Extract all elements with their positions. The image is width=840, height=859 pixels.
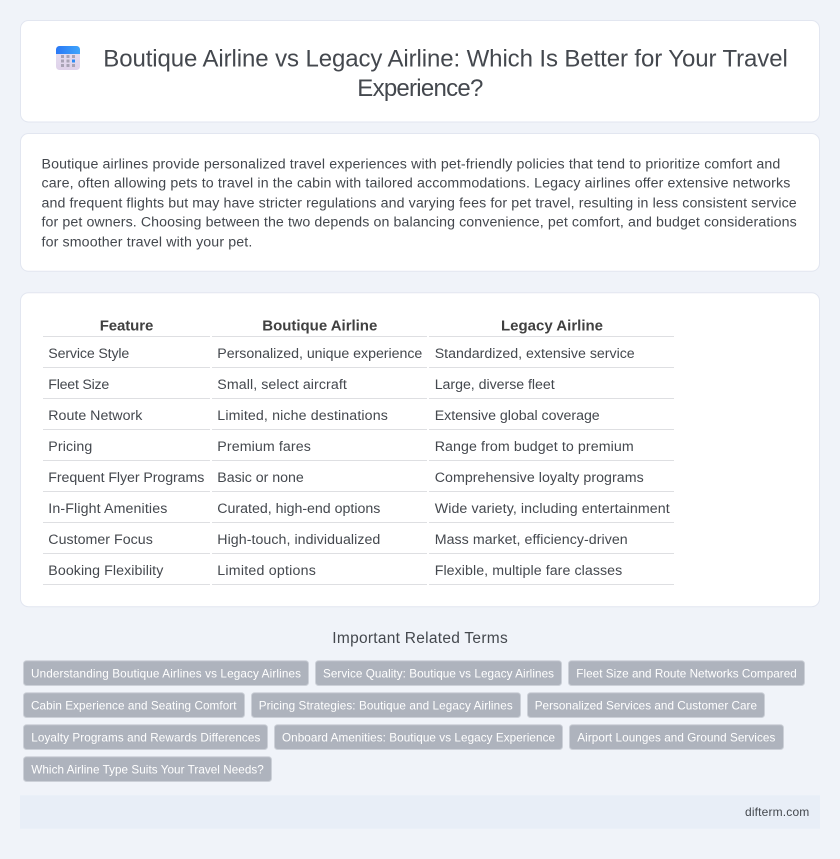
- table row: fleet size: Large, diverse fleet: [435, 377, 555, 393]
- table row: booking flexibility: [43, 563, 674, 585]
- table row: service style: Service Style: [48, 346, 129, 362]
- table row: customer focus: Customer Focus: [48, 532, 153, 548]
- table header row: Legacy Airline: [501, 318, 603, 334]
- table row: route network: Extensive global coverage: [435, 408, 600, 424]
- tag: onboard amenities: [274, 725, 562, 750]
- table row: service style: [43, 346, 674, 368]
- tag: pricing strategies: Pricing Strategies: Boutique and Legacy Airlines: [259, 699, 513, 712]
- table header row: Boutique Airline: [262, 318, 377, 334]
- tag: loyalty programs: [24, 725, 268, 750]
- tag: airport lounges: Airport Lounges and Ground Services: [577, 731, 775, 744]
- icon: calendar: [56, 46, 80, 70]
- panel: header: [20, 20, 820, 122]
- table row: route network: Limited, niche destinations: [217, 408, 388, 424]
- table row: pricing: Range from budget to premium: [435, 439, 634, 455]
- table row: route network: [43, 408, 674, 430]
- table row: fleet size: [43, 377, 674, 399]
- footer: difterm.com: [745, 805, 809, 819]
- tag: which airline type: Which Airline Type Suits Your Travel Needs?: [31, 763, 264, 776]
- table row: fleet size: Small, select aircraft: [217, 377, 347, 393]
- panel: introduction: [20, 134, 820, 271]
- text block: introduction paragraph: for smoother travel with your pet.: [42, 234, 252, 250]
- table header row: Feature: [100, 318, 153, 334]
- table row: in-flight amenities: Curated, high-end options: [217, 501, 380, 517]
- title: Experience?: [357, 75, 483, 102]
- table row: frequent flyer programs: Comprehensive loyalty programs: [435, 470, 644, 486]
- tag: understanding: Understanding Boutique Airlines vs Legacy Airlines: [31, 667, 301, 680]
- table row: pricing: [43, 439, 674, 461]
- tag: airport lounges: [570, 725, 784, 750]
- table row: service style: Personalized, unique experience: [217, 346, 422, 362]
- table row: pricing: Premium fares: [217, 439, 311, 455]
- title: [103, 46, 788, 102]
- tag: onboard amenities: Onboard Amenities: Boutique vs Legacy Experience: [282, 731, 555, 744]
- tag: pricing strategies: [252, 693, 520, 718]
- text block: introduction paragraph: [42, 156, 797, 250]
- heading: important related terms: Important Related Terms: [332, 630, 508, 647]
- text block: introduction paragraph: care, often allowing pets to travel in the cabin with tailored accommodations. Legacy airlines offer extensive networks: [42, 176, 790, 192]
- title: Boutique Airline vs Legacy Airline: Which Is Better for Your Travel: [103, 46, 788, 73]
- table row: in-flight amenities: In-Flight Amenities: [48, 501, 167, 517]
- table row: route network: Route Network: [48, 408, 143, 424]
- table row: frequent flyer programs: Basic or none: [217, 470, 304, 486]
- footer: [20, 795, 820, 829]
- tag: understanding: [24, 661, 308, 686]
- table row: customer focus: [43, 532, 674, 554]
- tag: fleet size: [568, 661, 804, 686]
- table row: in-flight amenities: Wide variety, including entertainment: [435, 501, 670, 517]
- table row: frequent flyer programs: [43, 470, 674, 492]
- tag: service quality: Service Quality: Boutique vs Legacy Airlines: [323, 667, 554, 680]
- text block: introduction paragraph: Boutique airlines provide personalized travel experiences with pet-friendly policies that tend to prioritize comfort and: [42, 156, 780, 172]
- tag: loyalty programs: Loyalty Programs and Rewards Differences: [31, 731, 260, 744]
- tag: personalized services: [528, 693, 764, 718]
- table row: booking flexibility: Flexible, multiple fare classes: [435, 563, 622, 579]
- table row: booking flexibility: Booking Flexibility: [48, 563, 164, 579]
- tag: fleet size: Fleet Size and Route Networks Compared: [576, 667, 797, 680]
- table row: booking flexibility: Limited options: [217, 563, 316, 579]
- table row: pricing: Pricing: [48, 439, 92, 455]
- table row: service style: Standardized, extensive service: [435, 346, 635, 362]
- panel: related term tags: [24, 661, 804, 782]
- table header row: [43, 318, 674, 337]
- table row: customer focus: Mass market, efficiency-driven: [435, 532, 628, 548]
- panel: comparison table: [20, 293, 820, 607]
- tag: cabin experience: Cabin Experience and Seating Comfort: [31, 699, 237, 712]
- table row: fleet size: Fleet Size: [48, 377, 109, 393]
- tag: personalized services: Personalized Services and Customer Care: [535, 699, 757, 712]
- text block: introduction paragraph: and frequent flights but may have stricter regulations and varying fees for pet travel, resulting in less consistent service: [42, 195, 797, 211]
- text block: introduction paragraph: for pet owners. Choosing between the two depends on balancing convenience, pet comfort, and budget considerations: [42, 215, 797, 231]
- table row: in-flight amenities: [43, 501, 674, 523]
- tag: service quality: [316, 661, 562, 686]
- tag: which airline type: [24, 757, 272, 782]
- tag: cabin experience: [24, 693, 244, 718]
- table row: frequent flyer programs: Frequent Flyer Programs: [48, 470, 204, 486]
- table row: customer focus: High-touch, individualized: [217, 532, 380, 548]
